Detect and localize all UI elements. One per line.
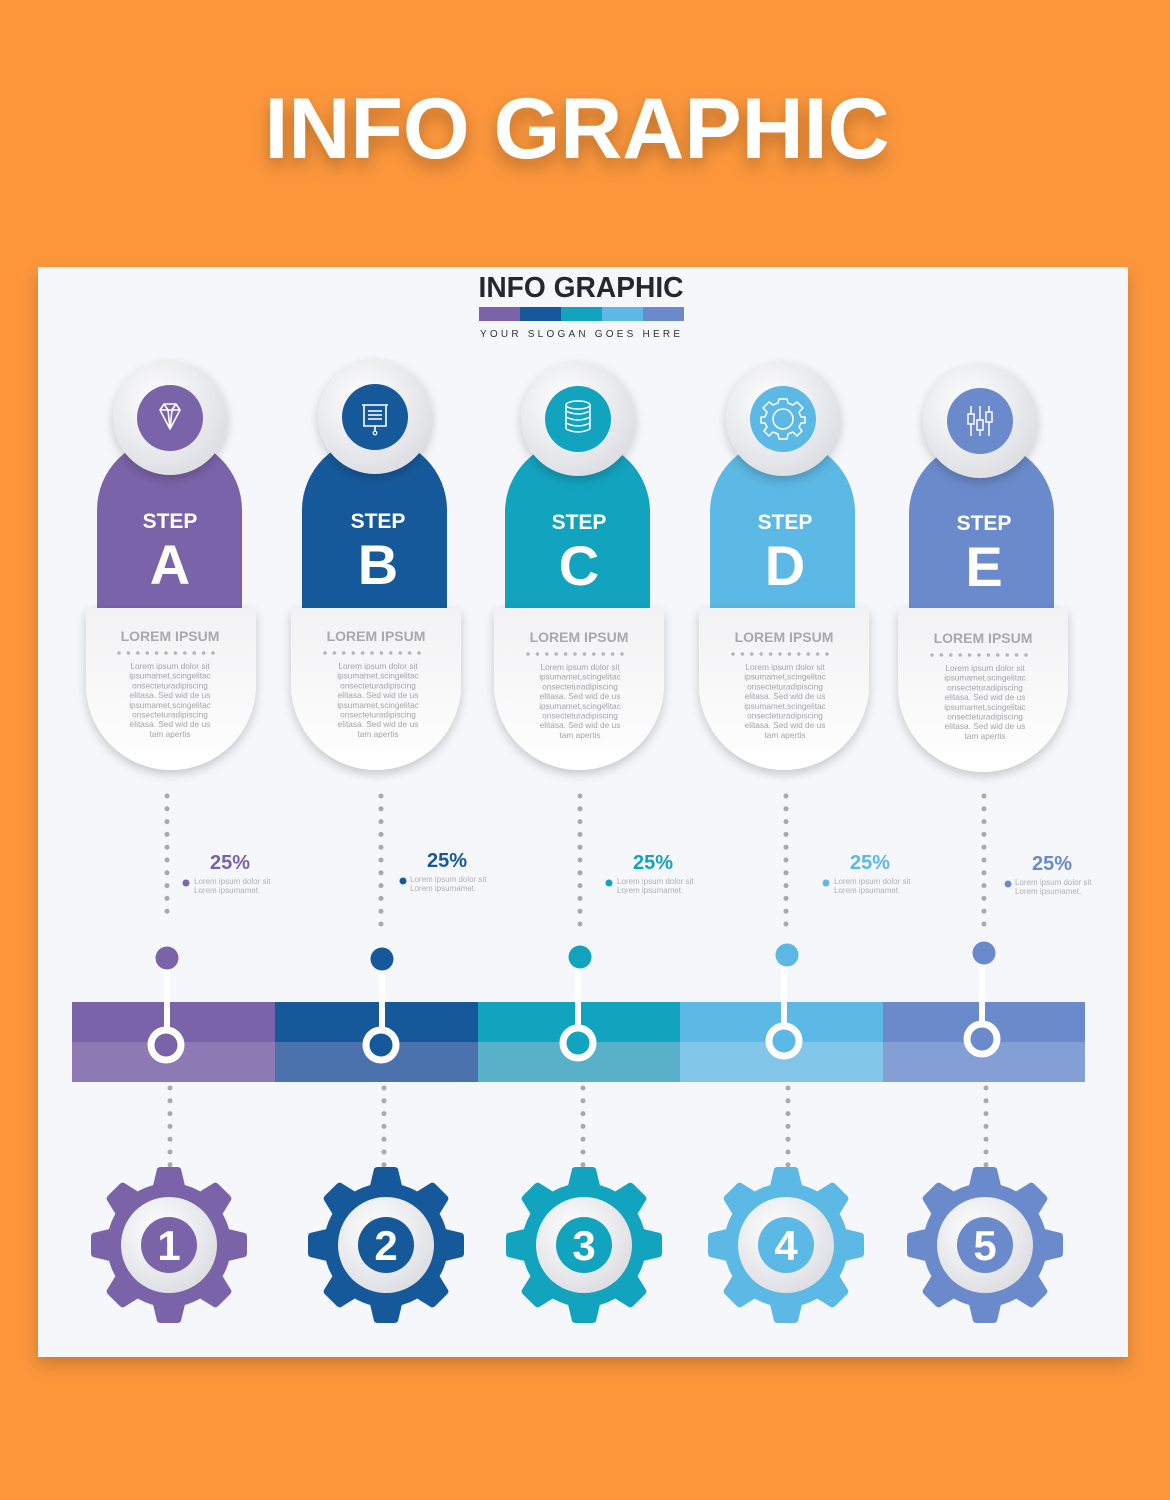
step E: ipsumamet,scingelitac <box>944 673 1026 683</box>
heading: inner title <box>478 272 684 340</box>
step C: C <box>559 534 599 597</box>
step B: elitasa. Sed wid de us <box>338 690 418 700</box>
step E: tam apertis <box>964 731 1006 741</box>
step D: ipsumamet,scingelitac <box>744 672 826 682</box>
card tab A <box>97 438 242 608</box>
icon: coin stack <box>521 362 635 476</box>
percentage labels: Lorem ipsum dolor sit <box>1015 878 1092 887</box>
percentage labels: Lorem ipsum dolor sit <box>194 877 271 886</box>
gear 1 <box>91 1167 247 1323</box>
step A: LOREM IPSUM <box>121 628 219 644</box>
step B <box>291 360 461 770</box>
step E: elitasa. Sed wid de us <box>945 721 1025 731</box>
step E: Lorem ipsum dolor sit <box>945 663 1025 673</box>
step C <box>494 362 664 770</box>
step B: tam apertis <box>357 729 399 739</box>
step E: E <box>965 535 1003 598</box>
step D: Lorem ipsum dolor sit <box>745 662 825 672</box>
card tab C <box>505 440 650 608</box>
step B: LOREM IPSUM <box>327 628 425 644</box>
step E: onsecteturadipiscing <box>947 682 1023 692</box>
card body B <box>291 608 461 770</box>
gear 2: 2 <box>374 1222 398 1269</box>
step E: STEP <box>957 512 1011 535</box>
step E: LOREM IPSUM <box>934 630 1032 646</box>
step D: onsecteturadipiscing <box>747 681 823 691</box>
step C: ipsumamet,scingelitac <box>539 701 621 711</box>
percentage labels: Lorem ipsumamet. <box>1015 887 1081 896</box>
step B: onsecteturadipiscing <box>340 680 416 690</box>
connectors: dotted lines <box>167 796 986 1165</box>
heading: inner title: YOUR SLOGAN GOES HERE <box>480 329 680 340</box>
step E: ipsumamet,scingelitac <box>944 702 1026 712</box>
step A: ipsumamet,scingelitac <box>129 700 211 710</box>
step D: tam apertis <box>764 730 806 740</box>
percentage labels: Lorem ipsumamet. <box>834 886 900 895</box>
card body E <box>898 608 1068 772</box>
step D: elitasa. Sed wid de us <box>745 691 825 701</box>
gear 4: 4 <box>774 1222 798 1269</box>
gear 4 <box>708 1167 864 1323</box>
step A <box>86 361 256 770</box>
step C: Lorem ipsum dolor sit <box>540 662 620 672</box>
icon: diamond <box>113 361 227 475</box>
card body A <box>86 608 256 770</box>
step A: ipsumamet,scingelitac <box>129 671 211 681</box>
step A: elitasa. Sed wid de us <box>130 690 210 700</box>
gear 2 <box>308 1167 464 1323</box>
step D <box>699 362 869 770</box>
heading: inner title: INFO GRAPHIC <box>478 272 684 304</box>
step B: elitasa. Sed wid de us <box>338 719 418 729</box>
step D: STEP <box>758 511 812 534</box>
percentage labels <box>182 850 1092 896</box>
step D: ipsumamet,scingelitac <box>744 701 826 711</box>
step B: ipsumamet,scingelitac <box>337 671 419 681</box>
step B: STEP <box>351 510 405 533</box>
step A: elitasa. Sed wid de us <box>130 719 210 729</box>
percentage labels: Lorem ipsumamet. <box>410 884 476 893</box>
step E: elitasa. Sed wid de us <box>945 692 1025 702</box>
percentage labels: Lorem ipsum dolor sit <box>410 875 487 884</box>
gear 3: 3 <box>572 1222 596 1269</box>
step B: B <box>358 533 398 596</box>
step D: onsecteturadipiscing <box>747 710 823 720</box>
step D: D <box>765 534 805 597</box>
percentage labels: Lorem ipsumamet. <box>617 886 683 895</box>
card tab B <box>302 438 447 608</box>
step E: onsecteturadipiscing <box>947 712 1023 722</box>
step C: LOREM IPSUM <box>530 629 628 645</box>
step A: A <box>150 533 190 596</box>
card body C <box>494 608 664 770</box>
card tab E <box>909 441 1054 608</box>
step C: ipsumamet,scingelitac <box>539 672 621 682</box>
card tab D <box>710 440 855 608</box>
step C: STEP <box>552 511 606 534</box>
percentage labels: Lorem ipsum dolor sit <box>834 877 911 886</box>
gear 5: 5 <box>973 1222 997 1269</box>
percentage labels: Lorem ipsum dolor sit <box>617 877 694 886</box>
step D: LOREM IPSUM <box>735 629 833 645</box>
percentage labels: 25% <box>633 852 673 874</box>
step A: onsecteturadipiscing <box>132 710 208 720</box>
bar: timeline <box>72 1002 1085 1082</box>
step B: onsecteturadipiscing <box>340 710 416 720</box>
percentage labels: 25% <box>210 852 250 874</box>
icon: presentation board <box>318 360 432 474</box>
icon: cog <box>726 362 840 476</box>
percentage labels: Lorem ipsumamet. <box>194 886 260 895</box>
markers on timeline <box>151 942 997 1060</box>
step E <box>898 364 1068 772</box>
step C: tam apertis <box>559 730 601 740</box>
step C: onsecteturadipiscing <box>542 681 618 691</box>
step C: onsecteturadipiscing <box>542 710 618 720</box>
gear 5 <box>907 1167 1063 1323</box>
percentage labels: 25% <box>850 852 890 874</box>
percentage labels: 25% <box>427 850 467 872</box>
gear 1: 1 <box>157 1222 181 1269</box>
step C: elitasa. Sed wid de us <box>540 691 620 701</box>
card body D <box>699 608 869 770</box>
step A: onsecteturadipiscing <box>132 680 208 690</box>
step A: Lorem ipsum dolor sit <box>130 661 210 671</box>
panel: main <box>38 267 1128 1357</box>
step B: Lorem ipsum dolor sit <box>338 661 418 671</box>
step A: STEP <box>143 510 197 533</box>
title: INFO GRAPHIC <box>264 81 890 177</box>
icon: sliders <box>923 364 1037 478</box>
percentage labels: 25% <box>1032 853 1072 875</box>
gear 3 <box>506 1167 662 1323</box>
step C: elitasa. Sed wid de us <box>540 720 620 730</box>
step A: tam apertis <box>149 729 191 739</box>
step B: ipsumamet,scingelitac <box>337 700 419 710</box>
step D: elitasa. Sed wid de us <box>745 720 825 730</box>
